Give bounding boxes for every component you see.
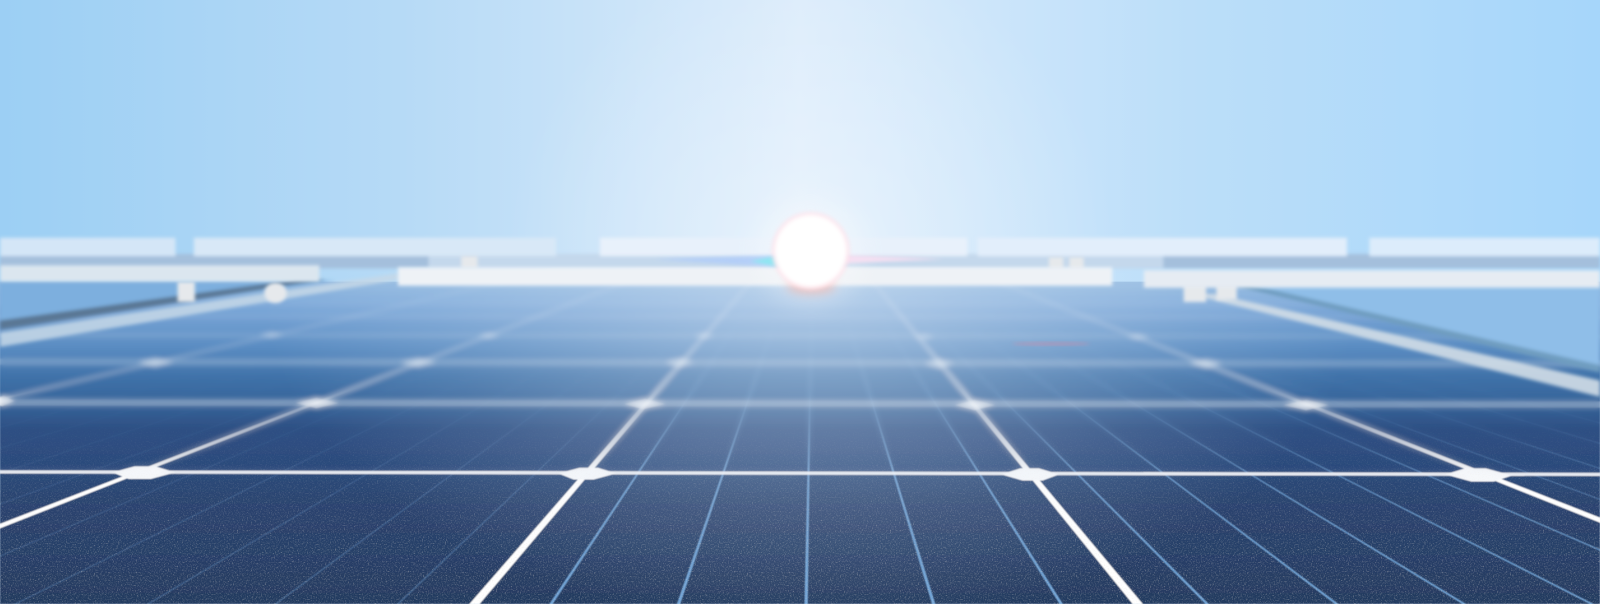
sun fringe <box>772 212 849 290</box>
solar panel surface with cell grid <box>0 282 1600 604</box>
sun with lens flare <box>653 198 944 304</box>
faint red lens artifact <box>1012 342 1090 345</box>
flare streaks <box>653 255 944 267</box>
right neighbouring array and frame <box>1189 284 1600 397</box>
left neighbouring array and frame <box>0 273 400 347</box>
dust speckle on near cells <box>0 436 1600 604</box>
mounting clips and posts <box>178 256 1237 303</box>
sky background <box>0 0 1600 296</box>
warm flare below sun <box>787 280 836 294</box>
back roof gap and upper mounting rail <box>0 238 1600 268</box>
sun disc <box>774 215 847 287</box>
distant panel area with depth-of-field blur <box>0 282 1600 472</box>
lower mounting rails <box>0 265 1600 288</box>
sun haze over panels <box>0 282 1600 604</box>
sun outer glow <box>757 198 863 304</box>
